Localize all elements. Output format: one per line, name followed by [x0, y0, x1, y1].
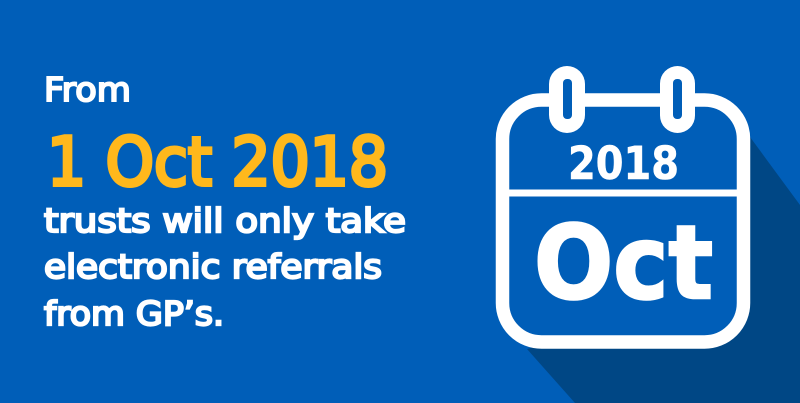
- calendar divider: [502, 190, 744, 196]
- body line 1: trusts will only take: [44, 201, 406, 240]
- right binder ring: [660, 66, 695, 133]
- icon: calendar: [502, 66, 744, 342]
- calendar long shadow: [527, 137, 800, 403]
- body line 3: from GP’s.: [44, 294, 224, 333]
- date: 1 Oct 2018: 1 Oct 2018: [47, 123, 388, 201]
- left binder ring: [549, 66, 585, 133]
- calendar month: Oct: [534, 204, 713, 323]
- calendar body: [502, 100, 744, 342]
- calendar year: 2018: [568, 137, 679, 190]
- headline text block: [44, 70, 406, 333]
- body line 2: electronic referrals: [44, 247, 382, 286]
- label: From: From: [44, 70, 131, 109]
